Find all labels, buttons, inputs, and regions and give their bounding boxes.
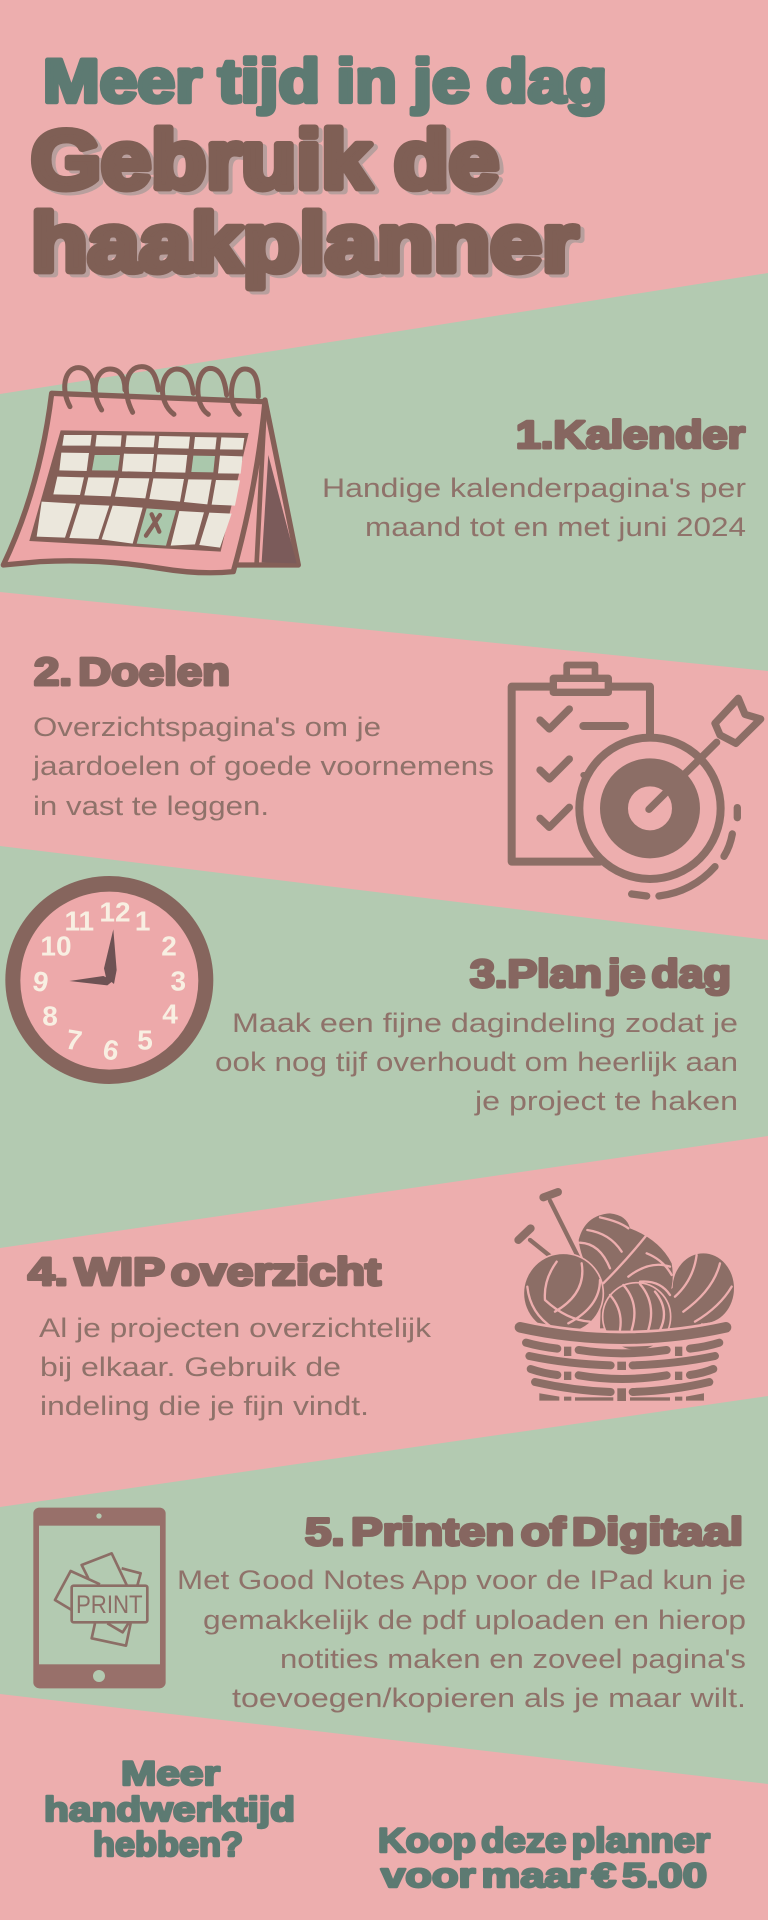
- body text: [177, 1565, 746, 1713]
- body text: [215, 1008, 738, 1116]
- body text: Handige kalenderpagina's per: [322, 473, 746, 503]
- title: [31, 47, 607, 289]
- band 3: [0, 1396, 768, 1784]
- body text: [322, 473, 746, 542]
- heading: 1.Kalender: 1.Kalender: [516, 414, 745, 457]
- body text: ook nog tijf overhoudt om heerlijk aan: [215, 1047, 738, 1077]
- icon: yarn basket: [518, 1192, 734, 1401]
- callout: Meer handwerktijd hebben?: hebben?: [93, 1826, 243, 1864]
- icon: wall clock: 12: [99, 897, 131, 928]
- heading: 3.Plan je dag: 3.Plan je dag: [470, 953, 731, 996]
- body text: Met Good Notes App voor de IPad kun je: [177, 1565, 746, 1595]
- callout: Koop deze planner: voor maar € 5.00: [381, 1857, 707, 1895]
- body text: je project te haken: [474, 1086, 738, 1116]
- body text: [32, 712, 494, 821]
- body text: Overzichtspagina's om je: [33, 712, 381, 742]
- icon: wall clock: 3: [171, 965, 186, 996]
- icon: clipboard and target: [512, 665, 761, 896]
- band 2: [0, 846, 768, 1248]
- icon: wall clock: 6: [101, 1034, 121, 1067]
- icon: wall clock: 1: [135, 905, 150, 936]
- body text: gemakkelijk de pdf uploaden en hierop: [203, 1605, 746, 1635]
- body text: notities maken en zoveel pagina's: [280, 1644, 746, 1674]
- section 5: Printen of Digitaal: [177, 1511, 746, 1713]
- body text: bij elkaar. Gebruik de: [40, 1352, 341, 1382]
- icon: wall clock: 8: [42, 1000, 58, 1031]
- heading: 5. Printen of Digitaal: 5. Printen of Digitaal: [305, 1511, 743, 1554]
- callout: Meer handwerktijd hebben?: [44, 1755, 295, 1864]
- body text: jaardoelen of goede voornemens: [32, 751, 494, 781]
- icon: wall clock: 9: [30, 965, 51, 998]
- body text: in vast te leggen.: [33, 791, 269, 821]
- icon: wall clock: 2: [161, 931, 177, 962]
- heading: Gebruik de: Gebruik de: [31, 113, 499, 206]
- band 1: [0, 273, 768, 671]
- callout: Koop deze planner: [378, 1822, 710, 1895]
- icon: wall clock: 10: [40, 931, 72, 962]
- icon: wall clock: [5, 876, 213, 1084]
- callout: Meer handwerktijd hebben?: Meer: [121, 1755, 220, 1793]
- section 2: Doelen: [32, 651, 494, 821]
- callout: Koop deze planner: Koop deze planner: [378, 1822, 710, 1860]
- subtitle: Meer tijd in je dag: Meer tijd in je dag: [43, 47, 607, 115]
- body text: [39, 1313, 432, 1421]
- body text: maand tot en met juni 2024: [365, 512, 746, 542]
- icon: desk calendar: [3, 367, 298, 573]
- icon: wall clock: 7: [64, 1024, 84, 1057]
- icon: tablet with print: [33, 1508, 166, 1688]
- heading: haakplanner: haakplanner: [31, 196, 578, 289]
- section 4: WIP overzicht: [28, 1251, 432, 1421]
- icon: wall clock: 5: [137, 1025, 153, 1056]
- body text: Maak een fijne dagindeling zodat je: [232, 1008, 738, 1038]
- icon: tablet with print: PRINT: [76, 1591, 143, 1619]
- heading: 4. WIP overzicht: 4. WIP overzicht: [28, 1251, 381, 1294]
- icon: wall clock: 11: [65, 906, 94, 937]
- heading: 2. Doelen: 2. Doelen: [34, 651, 230, 694]
- body text: toevoegen/kopieren als je maar wilt.: [232, 1683, 746, 1713]
- section 3: Plan je dag: [215, 953, 738, 1116]
- icon: wall clock: 4: [162, 999, 178, 1030]
- body text: indeling die je fijn vindt.: [40, 1391, 369, 1421]
- section 1: Kalender: [322, 414, 746, 542]
- body text: Al je projecten overzichtelijk: [39, 1313, 432, 1343]
- callout: Meer handwerktijd hebben?: handwerktijd: [44, 1791, 295, 1829]
